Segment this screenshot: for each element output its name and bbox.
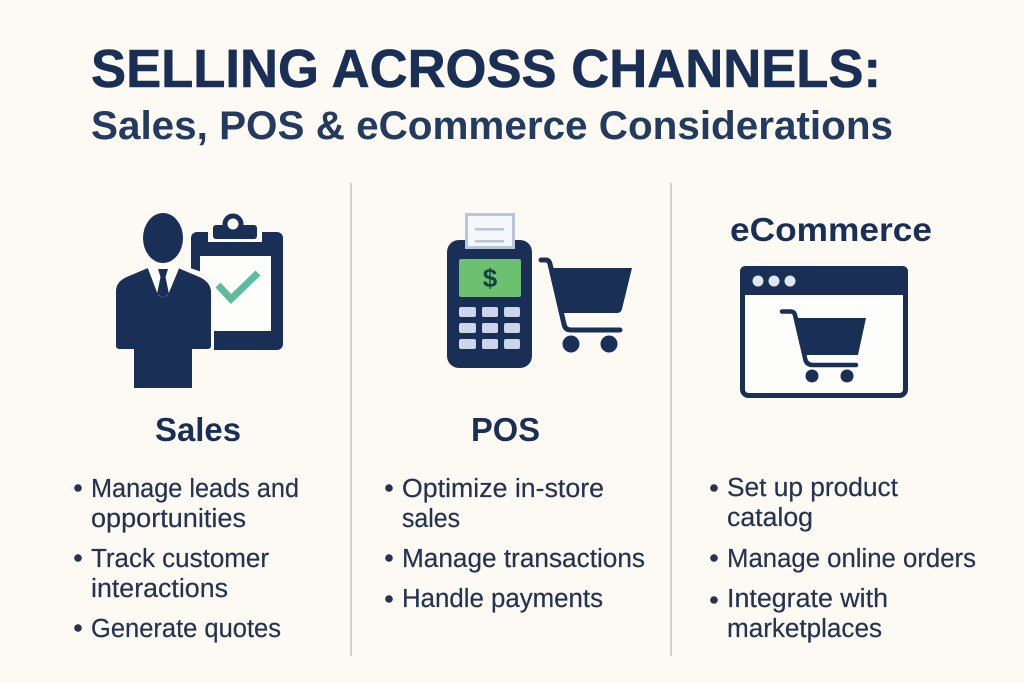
bullet list: eCommerce: Manage online orders — [727, 545, 976, 573]
bullet list: eCommerce: Set up product — [727, 474, 898, 502]
icon: browser window with cart — [740, 266, 908, 396]
bullet list: POS: sales — [402, 505, 460, 533]
heading: eCommerce: eCommerce — [730, 211, 932, 248]
bullet list: POS: Manage transactions — [402, 545, 645, 573]
bullet list: sales: Track customer — [91, 545, 270, 573]
heading: Sales: Sales — [155, 411, 241, 448]
icon: clipboard with check — [191, 216, 283, 350]
panel: sales — [74, 213, 299, 643]
bullet list: eCommerce: catalog — [727, 504, 813, 532]
icon: POS terminal: $ — [483, 263, 498, 293]
bullet list: eCommerce: Integrate with — [727, 585, 888, 613]
bullet list: sales — [74, 475, 299, 643]
panel: eCommerce — [710, 211, 976, 643]
bullet list: POS — [385, 475, 645, 613]
bullet list: sales: opportunities — [91, 505, 246, 533]
heading: POS: POS — [471, 411, 540, 448]
panel: POS — [385, 214, 645, 613]
bullet list: sales: Manage leads and — [91, 475, 299, 503]
title: SELLING ACROSS CHANNELS: — [91, 39, 881, 99]
bullet list: eCommerce — [710, 474, 976, 643]
bullet list: sales: Generate quotes — [91, 615, 281, 643]
icon: shopping cart — [541, 260, 632, 352]
bullet list: eCommerce: marketplaces — [727, 615, 882, 643]
bullet list: sales: interactions — [91, 575, 228, 603]
subtitle: Sales, POS & eCommerce Considerations — [91, 104, 893, 148]
bullet list: POS: Optimize in-store — [402, 475, 604, 503]
icon: POS terminal — [447, 214, 532, 368]
bullet list: POS: Handle payments — [402, 585, 603, 613]
icon: businessman — [113, 213, 214, 391]
